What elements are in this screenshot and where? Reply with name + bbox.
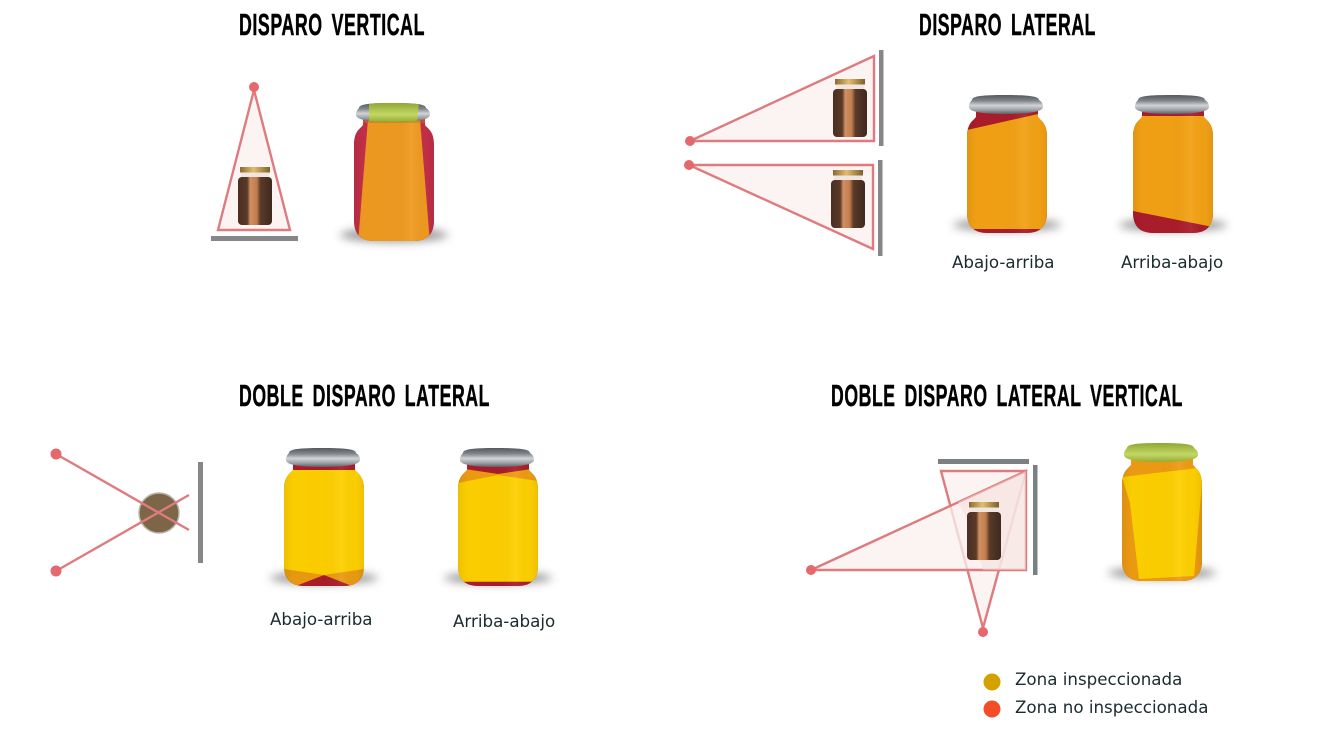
jar: double lateral vertical result [1108, 443, 1216, 583]
diagram: double lateral vertical shot [806, 459, 1038, 637]
label: abajo-arriba: Abajo-arriba [952, 252, 1055, 272]
label: abajo-arriba: Abajo-arriba [270, 609, 373, 629]
jar: lateral arriba-abajo [1119, 95, 1227, 235]
title: disparo vertical: DISPARO VERTICAL [239, 7, 425, 42]
diagram: lateral shots [684, 50, 884, 256]
label: arriba-abajo: Arriba-abajo [453, 611, 555, 631]
legend: Zona no inspeccionada [1015, 697, 1208, 717]
legend [984, 669, 1208, 718]
diagram: double lateral shot [50, 448, 203, 576]
title: doble disparo lateral: DOBLE DISPARO LATERAL [239, 378, 490, 413]
legend: Zona inspeccionada [1015, 669, 1182, 689]
jar: lateral abajo-arriba [953, 95, 1061, 235]
jar: double lateral arriba-abajo [444, 448, 552, 588]
jar: double lateral abajo-arriba [270, 448, 378, 588]
title: disparo lateral: DISPARO LATERAL [919, 7, 1096, 42]
label: arriba-abajo: Arriba-abajo [1121, 252, 1223, 272]
diagram: vertical shot [211, 82, 298, 241]
jar: vertical shot result [340, 103, 448, 243]
